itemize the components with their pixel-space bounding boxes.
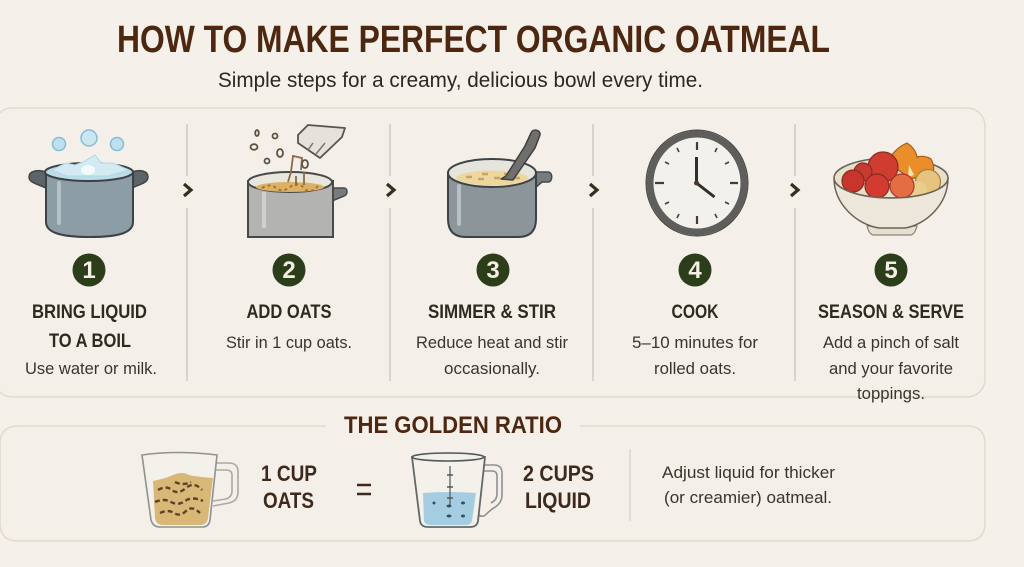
icon: cup of liquid	[412, 453, 502, 527]
number badge 5: 5	[884, 257, 898, 284]
step 1 heading: BRING LIQUID	[32, 301, 147, 323]
icon: pot with oats	[248, 125, 347, 237]
step 4 text	[632, 333, 758, 378]
arrow 3	[590, 184, 597, 196]
number badge 4	[678, 254, 712, 286]
label: 1 cup oats: OATS	[263, 488, 314, 513]
number badge 5	[874, 254, 908, 286]
number badge 2: 2	[282, 257, 296, 284]
ratio note: Adjust liquid for thicker	[662, 463, 835, 482]
panel: golden ratio	[0, 412, 985, 541]
arrow 2	[387, 184, 394, 196]
step 1	[25, 130, 157, 378]
step 5 text: Add a pinch of salt	[823, 333, 959, 352]
label: 2 cups liquid: LIQUID	[525, 488, 591, 513]
step 4 text: 5–10 minutes for	[632, 333, 758, 352]
step 4 heading: COOK	[672, 301, 718, 323]
icon: pot with spoon	[448, 130, 552, 237]
step 3	[416, 130, 568, 378]
label: 2 cups liquid: 2 CUPS	[523, 461, 594, 486]
icon: fruit bowl	[834, 143, 948, 235]
step 3 heading: SIMMER & STIR	[428, 301, 556, 323]
label: 1 cup oats: 1 CUP	[261, 461, 317, 486]
title: HOW TO MAKE PERFECT ORGANIC OATMEAL	[117, 19, 830, 61]
number badge 4: 4	[688, 257, 702, 284]
panel: steps	[0, 108, 985, 397]
ratio note	[662, 463, 835, 507]
label: 2 cups liquid	[523, 461, 594, 513]
number badge 1	[72, 254, 106, 286]
step 3 text: Reduce heat and stir	[416, 333, 568, 352]
step 1 heading	[32, 301, 147, 352]
step 5 text: and your favorite	[829, 359, 953, 378]
step 2 heading: ADD OATS	[246, 301, 332, 323]
step 3 text	[416, 333, 568, 378]
step 5 text: toppings.	[857, 384, 925, 403]
equals sign	[357, 485, 371, 494]
step 2 text: Stir in 1 cup oats.	[226, 333, 352, 352]
icon: clock	[646, 130, 748, 236]
icon: boiling pot	[29, 130, 148, 237]
step 5 text	[823, 333, 959, 403]
arrow 1	[184, 184, 191, 196]
subtitle: Simple steps for a creamy, delicious bowl every time.	[218, 68, 703, 92]
step 1 text: Use water or milk.	[25, 359, 157, 378]
step 4	[632, 130, 758, 378]
icon: scoop	[298, 125, 345, 158]
icon: cup of oats	[142, 452, 238, 527]
number badge 3: 3	[486, 257, 500, 284]
step 3 text: occasionally.	[444, 359, 540, 378]
step 4 text: rolled oats.	[654, 359, 736, 378]
step 2	[226, 125, 352, 352]
step 1 heading: TO A BOIL	[49, 330, 131, 352]
ratio heading: THE GOLDEN RATIO	[344, 412, 562, 439]
step 5	[818, 143, 964, 403]
step 5 heading: SEASON & SERVE	[818, 301, 964, 323]
arrow 4	[791, 184, 798, 196]
number badge 1: 1	[82, 257, 96, 284]
number badge 2	[272, 254, 306, 286]
number badge 3	[476, 254, 510, 286]
ratio note: (or creamier) oatmeal.	[664, 488, 832, 507]
label: 1 cup oats	[261, 461, 317, 513]
